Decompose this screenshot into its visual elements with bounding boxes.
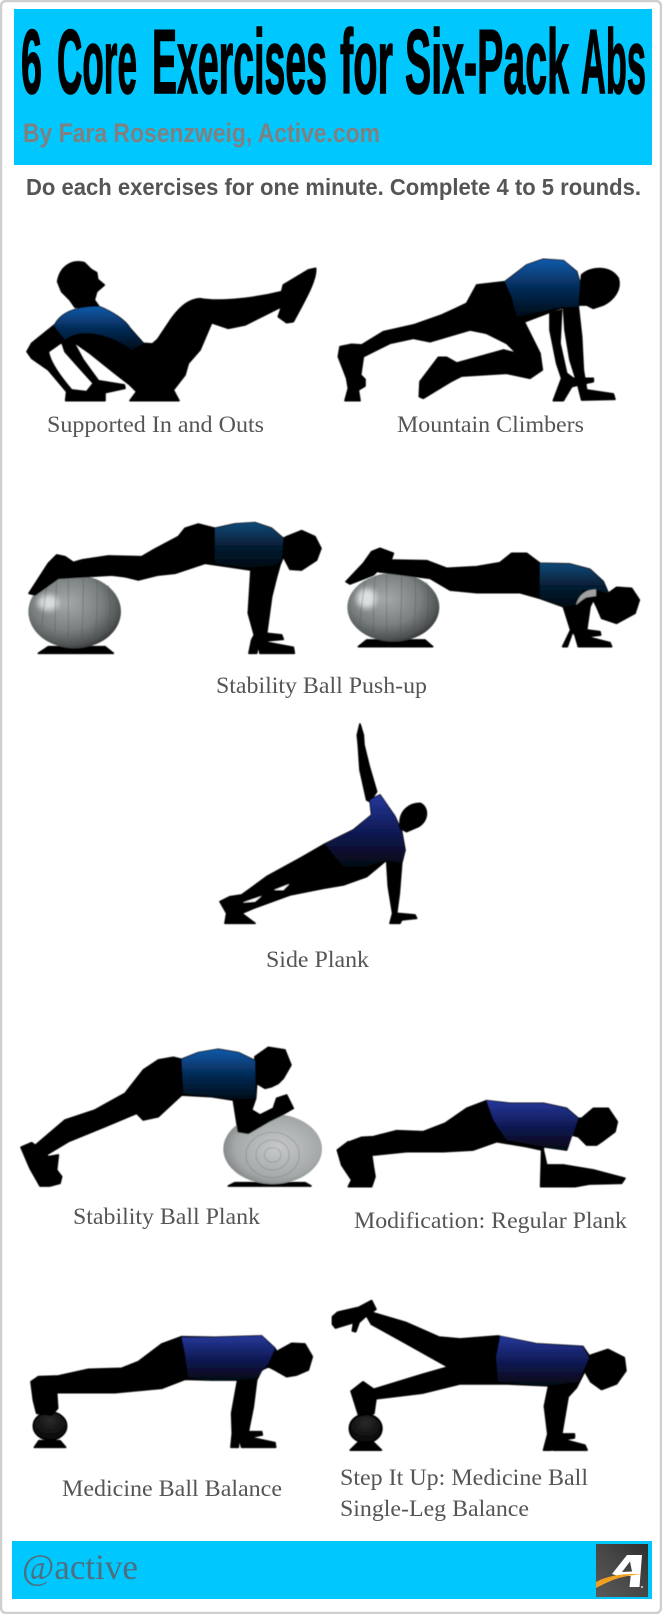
label: stability ball plank: Stability Ball Plank xyxy=(73,1204,261,1229)
panel: footer banner xyxy=(12,1541,652,1599)
instruction text: Do each exercises for one minute. Complete 4 to 5 rounds. xyxy=(26,174,641,200)
figure: supported in and outs xyxy=(27,262,316,401)
label: mountain climbers: Mountain Climbers xyxy=(397,412,584,437)
label: modification regular plank: Modification: Regular Plank xyxy=(354,1208,628,1233)
title: for xyxy=(340,12,393,113)
label: step it up: Step It Up: Medicine Ball xyxy=(340,1465,588,1490)
figure: stability ball push-up, arms bent xyxy=(346,548,639,647)
label: step it up: Single-Leg Balance xyxy=(340,1496,529,1521)
figure: stability ball push-up, arms extended xyxy=(28,523,321,653)
figure: mountain climbers xyxy=(338,259,619,401)
title: Exercises xyxy=(152,12,327,113)
handle: @active xyxy=(22,1547,138,1587)
label: side plank: Side Plank xyxy=(266,947,370,972)
figure: regular plank xyxy=(337,1101,625,1187)
label: stability ball push-up: Stability Ball Push-up xyxy=(216,673,427,698)
figure: medicine ball single-leg balance xyxy=(333,1301,626,1450)
title: Core xyxy=(57,12,137,113)
figure: side plank xyxy=(220,724,426,923)
icon: active logo xyxy=(596,1544,648,1597)
label: supported in and outs: Supported In and Outs xyxy=(47,412,264,437)
panel: header banner xyxy=(14,9,652,165)
title: 6 xyxy=(21,12,42,113)
byline: By Fara Rosenzweig, Active.com xyxy=(23,118,380,148)
figure: stability ball plank xyxy=(21,1047,322,1186)
figure: medicine ball balance xyxy=(31,1336,312,1447)
label: medicine ball balance: Medicine Ball Balance xyxy=(62,1476,282,1501)
